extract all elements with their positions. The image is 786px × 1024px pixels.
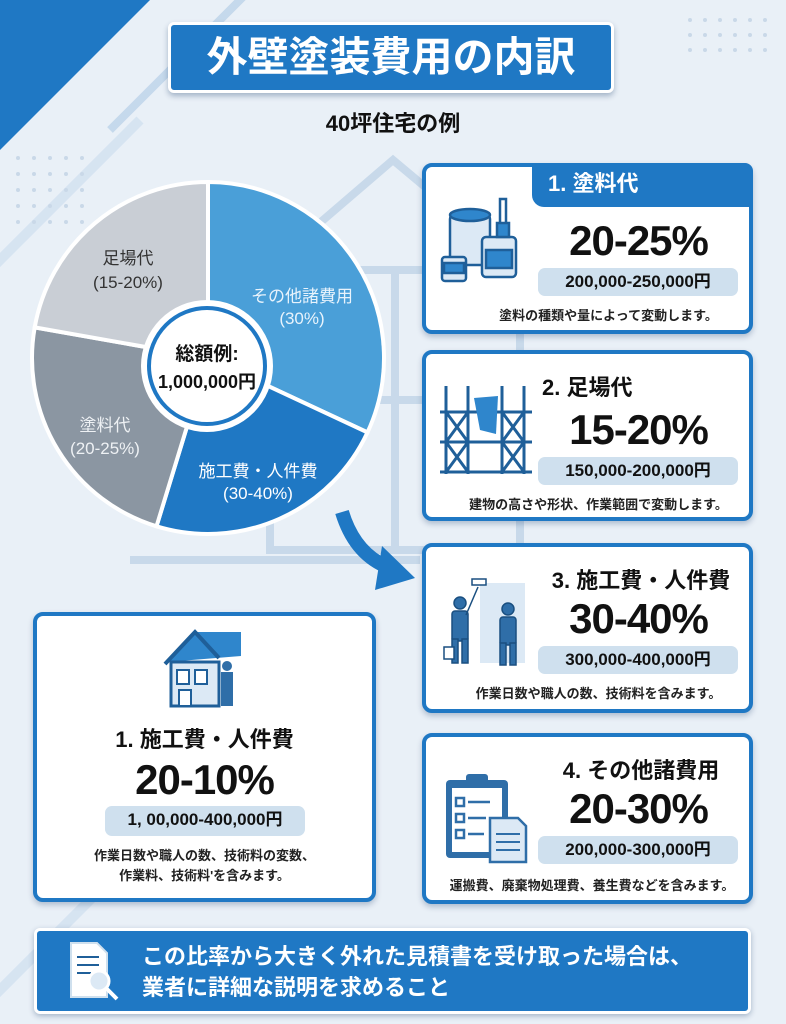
pie chart: 塗料代 [80,416,130,435]
percent: 20-25% [569,217,708,264]
note: 塗料の種類や量によって変動します。 [499,308,718,323]
pie chart: (30-40%) [223,484,293,503]
pie chart: 総額例: [175,343,239,365]
card 3: labor [422,543,753,713]
icon: painters [443,578,525,666]
left card: labor detail [33,612,376,902]
banner text: この比率から大きく外れた見積書を受け取った場合は、 [142,944,692,969]
card 2: scaffolding [422,350,753,521]
arrow [335,510,415,590]
amount pill [538,646,738,674]
icon: clipboard [446,774,528,864]
amount pill: 150,000-200,000円 [565,461,711,480]
amount pill: 200,000-250,000円 [565,272,711,291]
pie chart: 1,000,000円 [158,372,256,392]
percent: 15-20% [569,406,708,453]
banner text [142,944,692,1000]
amount pill: 1, 00,000-400,000円 [127,810,282,829]
tab header [532,163,753,207]
pie chart: その他諸費用 [251,287,353,306]
pie chart: 足場代 [102,249,154,268]
bottom banner [34,928,751,1014]
title: 外壁塗装費用の内訳 [206,34,576,80]
amount pill [538,268,738,296]
card title: 1. 施工費・人件費 [115,727,294,752]
card 4: other costs [422,733,753,904]
icon: scaffolding [440,386,532,474]
amount pill: 300,000-400,000円 [565,650,711,669]
subtitle: 40坪住宅の例 [326,111,460,136]
icon: house with painter [164,629,241,708]
percent: 20-30% [569,785,708,832]
card title: 4. その他諸費用 [563,758,719,783]
amount pill: 200,000-300,000円 [565,840,711,859]
note: 建物の高さや形状、作業範囲で変動します。 [469,497,728,512]
card 1: paint [422,163,753,334]
pie chart: (20-25%) [70,439,140,458]
note: 作業料、技術料'を含みます。 [119,868,290,883]
pie chart: 施工費・人件費 [198,462,318,481]
title [168,22,614,93]
icon: document with magnifier [70,942,118,1000]
note [94,848,315,883]
amount pill [105,806,305,836]
note: 作業日数や職人の数、技術料の変数、 [94,848,315,863]
amount pill [538,836,738,864]
note: 作業日数や職人の数、技術料を含みます。 [476,686,721,701]
percent: 30-40% [569,595,708,642]
pie chart: (30%) [279,309,325,328]
icon: paint cans [440,198,518,282]
card title: 3. 施工費・人件費 [552,568,730,593]
pie chart: (15-20%) [93,273,163,292]
tab header: 1. 塗料代 [548,171,638,196]
pie chart [30,180,386,536]
percent: 20-10% [135,756,274,803]
card title: 2. 足場代 [542,375,632,400]
note: 運搬費、廃棄物処理費、養生費などを含みます。 [450,878,734,893]
amount pill [538,457,738,485]
banner text: 業者に詳細な説明を求めること [142,975,450,1000]
